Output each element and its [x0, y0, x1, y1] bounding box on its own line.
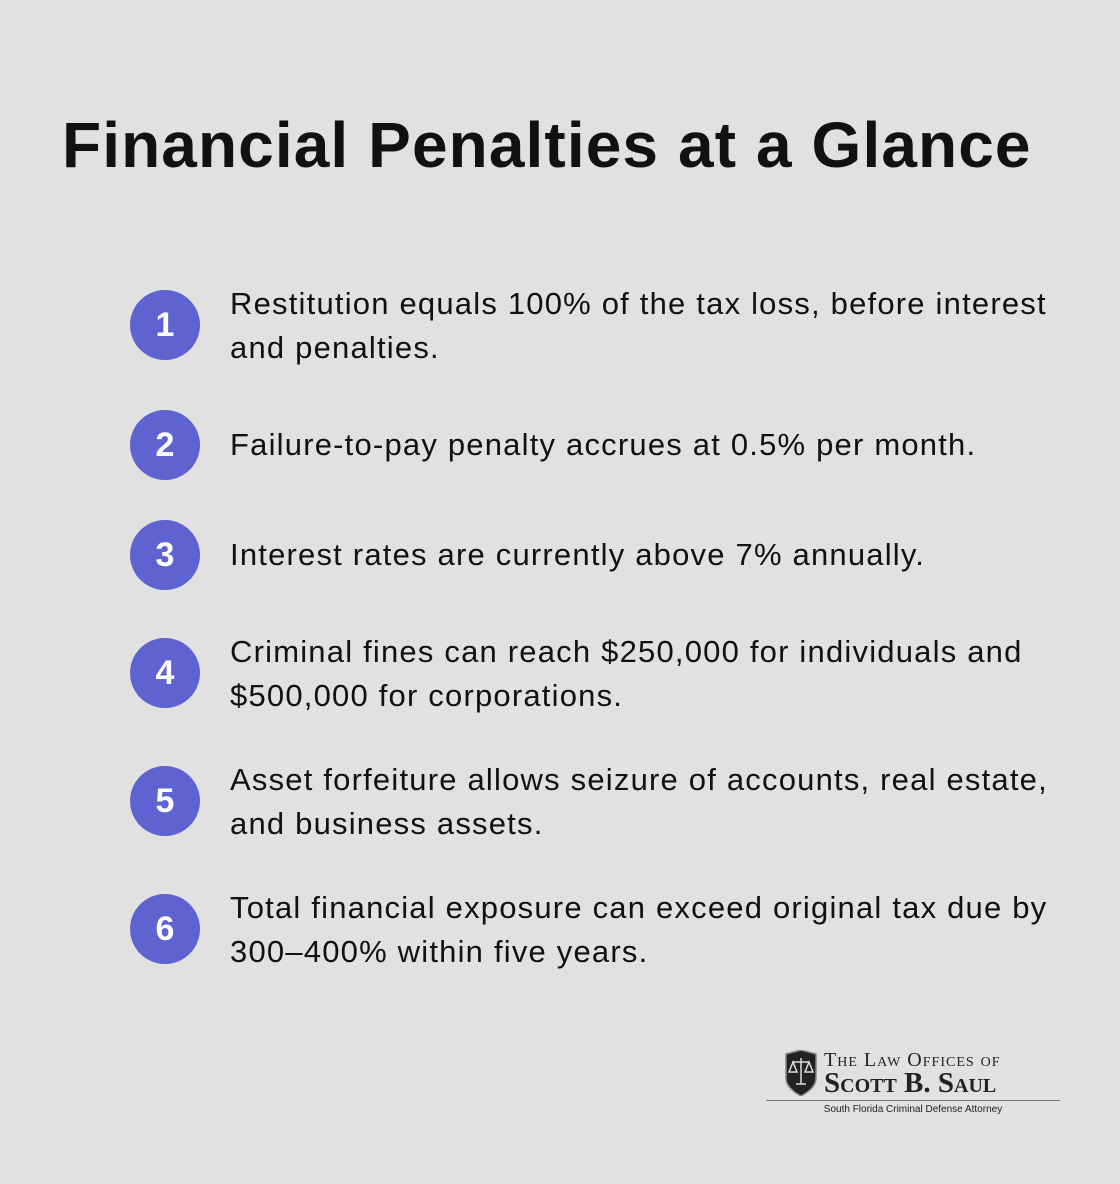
circle 6: 6 [156, 910, 174, 948]
text 2: Failure-to-pay penalty accrues at 0.5% per month. [230, 427, 976, 462]
item 6 [130, 890, 1047, 969]
circle 6 [130, 894, 200, 964]
logo text: The Law Offices of [824, 1049, 1001, 1071]
circle 2 [130, 410, 200, 480]
circle 5 [130, 766, 200, 836]
item 4 [130, 634, 1023, 713]
circle 3: 3 [156, 536, 174, 574]
circle 2: 2 [156, 426, 174, 464]
text 6: Total financial exposure can exceed original tax due by 300–400% within five years. [230, 890, 1047, 969]
item 3 [130, 520, 925, 590]
circle 1: 1 [156, 306, 174, 344]
icon: shield with scales [785, 1050, 817, 1096]
circle 5: 5 [156, 782, 174, 820]
text 5: Asset forfeiture allows seizure of accounts, real estate, and business assets. [230, 762, 1048, 841]
text 3: Interest rates are currently above 7% annually. [230, 537, 925, 572]
circle 1 [130, 290, 200, 360]
circle 3 [130, 520, 200, 590]
text 4: Criminal fines can reach $250,000 for individuals and $500,000 for corporations. [230, 634, 1023, 713]
circle 4 [130, 638, 200, 708]
item 5 [130, 762, 1048, 841]
logo text: Scott B. Saul [824, 1067, 996, 1099]
circle 4: 4 [156, 654, 174, 692]
item 2 [130, 410, 976, 480]
item 1 [130, 286, 1047, 365]
title: Financial Penalties at a Glance [62, 109, 1032, 181]
text 1: Restitution equals 100% of the tax loss, before interest and penalties. [230, 286, 1047, 365]
logo [766, 1049, 1060, 1115]
logo text [824, 1049, 1001, 1099]
tagline: South Florida Criminal Defense Attorney [824, 1104, 1002, 1115]
